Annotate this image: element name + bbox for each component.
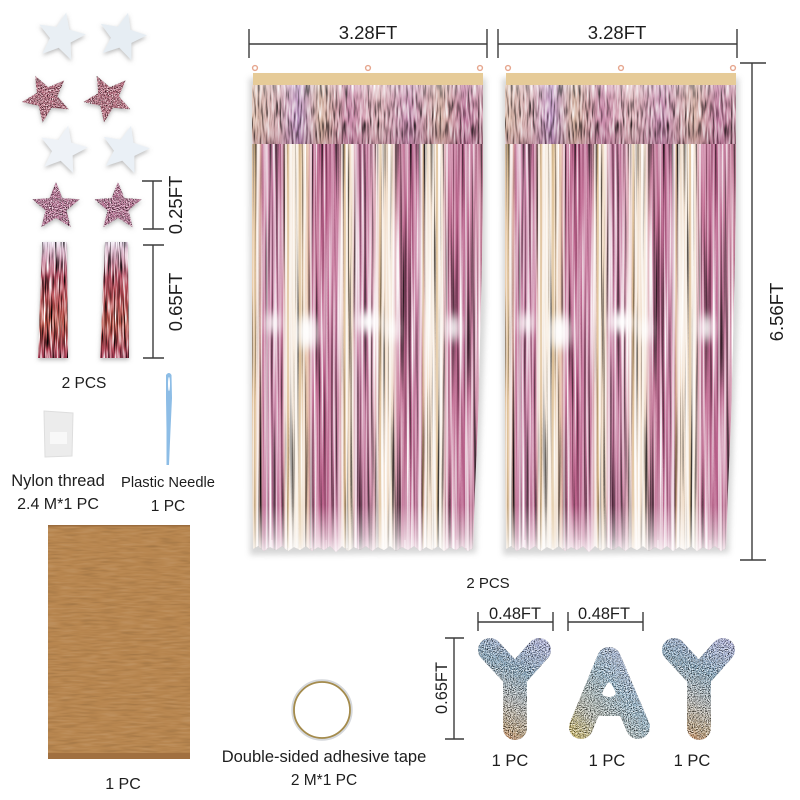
dimension: letter Y width [478, 605, 553, 631]
icon: glitter letter Y [490, 650, 539, 728]
icon: holographic tassel, left [38, 242, 68, 358]
dimension: curtain height [740, 63, 787, 560]
label: plastic needle: Plastic Needle [121, 475, 215, 491]
dimension: tassel length: 0.65FT [165, 273, 186, 331]
label: tape: 2 M*1 PC [291, 772, 357, 789]
dimension: right curtain width [498, 22, 737, 58]
icon: white star, top right [94, 7, 151, 62]
label: second Y quantity: 1 PC [674, 752, 710, 770]
label: first Y quantity: 1 PC [492, 752, 528, 770]
label: nylon thread: 2.4 M*1 PC [17, 496, 99, 513]
label: nylon thread [11, 472, 105, 513]
label: plastic needle [121, 475, 215, 515]
label: nylon thread: Nylon thread [11, 472, 105, 490]
label: tassels quantity: 2 PCS [62, 375, 106, 392]
dimension: right curtain width: 3.28FT [588, 22, 646, 43]
icon: glitter star, row four right [94, 182, 142, 227]
dimension: letter A width [568, 605, 643, 631]
icon: glitter letter A [581, 659, 638, 727]
dimension: curtain height: 6.56FT [766, 283, 787, 341]
icon: double-sided tape roll [292, 680, 352, 740]
icon: glitter star, row four left [32, 182, 80, 227]
icon: nylon thread packet [44, 411, 73, 457]
dimension: left curtain width [249, 22, 487, 58]
panel: foil fringe curtain, left [249, 66, 486, 555]
dimension: tassel length [143, 245, 186, 358]
label: A quantity: 1 PC [589, 752, 625, 770]
dimension: star size: 0.25FT [165, 176, 186, 234]
label: tape [222, 748, 426, 789]
icon: white star, row three right [97, 120, 154, 175]
icon: holographic tassel, right [100, 242, 129, 358]
dimension: letter Y width: 0.48FT [489, 605, 541, 623]
label: plastic needle: 1 PC [151, 498, 185, 515]
dimension: letter height: 0.65FT [433, 662, 451, 714]
icon: glitter star, row two left [14, 65, 77, 127]
panel: foil fringe curtain, right [502, 66, 739, 555]
icon: white star, top left [34, 8, 89, 62]
label: tape: Double-sided adhesive tape [222, 748, 426, 766]
icon: glitter letter Y, second [674, 650, 723, 728]
dimension: star size [142, 176, 186, 234]
panel: cardboard backing [48, 525, 190, 759]
icon: plastic needle [166, 373, 172, 465]
dimension: letter height [433, 638, 464, 739]
icon: glitter star, row two right [75, 65, 138, 127]
dimension: left curtain width: 3.28FT [339, 22, 397, 43]
label: cardboard quantity: 1 PC [105, 776, 141, 793]
icon: white star, row three left [36, 121, 91, 175]
label: curtains quantity: 2 PCS [466, 575, 510, 592]
dimension: letter A width: 0.48FT [578, 605, 630, 623]
